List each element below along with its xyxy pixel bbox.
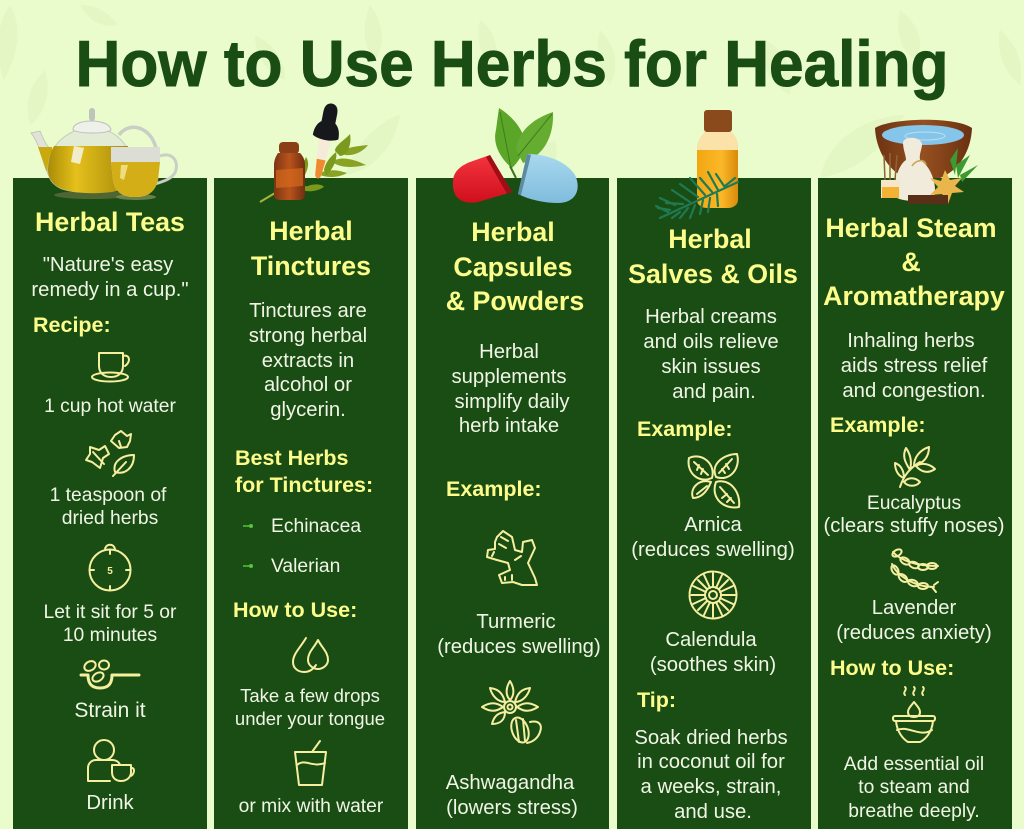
tip text: a weeks, strain, xyxy=(641,776,781,798)
icon: eucalyptus xyxy=(895,447,935,487)
description: simplify daily xyxy=(455,391,570,413)
heading: Herbal Teas xyxy=(35,207,185,237)
step: strain: Strain it xyxy=(74,699,146,722)
herb: eucalyptus: (clears stuffy noses) xyxy=(823,515,1005,537)
icon: glass with straw xyxy=(295,741,326,785)
herb: turmeric: Turmeric xyxy=(476,611,556,633)
column 2: herbal tinctures xyxy=(233,216,385,817)
column 1: herbal teas xyxy=(31,207,189,814)
step: drops: Take a few drops xyxy=(240,685,380,706)
icon: lavender xyxy=(890,548,938,592)
subheading: best herbs: for Tinctures: xyxy=(235,473,373,497)
panel: capsules background xyxy=(416,178,609,829)
icon: ashwagandha flower xyxy=(482,681,541,745)
description: alcohol or xyxy=(264,374,352,396)
illustration: teapot and cup xyxy=(31,108,176,200)
description: supplements xyxy=(452,366,566,388)
background leaf pattern xyxy=(0,5,1021,178)
heading: Herbal xyxy=(269,216,353,246)
tip text: and use. xyxy=(674,801,752,823)
subheading: example: Example: xyxy=(830,413,926,437)
heading: & xyxy=(901,247,921,277)
icon: arnica leaves xyxy=(689,454,739,507)
herb: calendula: (soothes skin) xyxy=(650,654,776,676)
panel: steam background xyxy=(818,178,1012,829)
heading: Tinctures xyxy=(251,251,371,281)
bullet list xyxy=(243,516,361,577)
illustration: tincture bottle and dropper xyxy=(260,101,368,202)
description: herb intake xyxy=(459,415,559,437)
heading: Herbal xyxy=(471,217,555,247)
description: glycerin. xyxy=(270,399,346,421)
subheading: example: Example: xyxy=(637,417,733,441)
title: How to Use Herbs for Healing xyxy=(76,27,948,100)
herb: ashwagandha: Ashwagandha xyxy=(446,772,575,794)
icon: drops xyxy=(293,638,328,672)
column 3: capsules and powders xyxy=(437,217,601,819)
heading: Herbal Steam xyxy=(825,213,997,243)
herb: ashwagandha: (lowers stress) xyxy=(446,797,578,819)
description: Herbal xyxy=(479,341,539,363)
subheading: tip: Tip: xyxy=(637,688,676,712)
icon: timer: 5 xyxy=(107,566,113,577)
description: and oils relieve xyxy=(643,331,779,353)
description: strong herbal xyxy=(249,325,367,347)
subheading: example: Example: xyxy=(446,477,542,501)
icon: strainer xyxy=(81,659,139,688)
icon: person drinking xyxy=(88,740,134,781)
heading: Aromatherapy xyxy=(823,281,1005,311)
description: and congestion. xyxy=(842,380,986,402)
column 5: steam and aromatherapy xyxy=(823,213,1005,822)
icon: timer xyxy=(90,545,130,590)
heading: Capsules xyxy=(453,252,573,282)
step: essential oil: breathe deeply. xyxy=(848,801,980,822)
icon: dried leaves xyxy=(86,431,134,476)
step: drink: Drink xyxy=(86,792,135,814)
illustration: capsule and leaves xyxy=(453,108,578,203)
panel: salves background xyxy=(617,178,811,829)
heading: Salves & Oils xyxy=(628,259,798,289)
herb: eucalyptus: Eucalyptus xyxy=(867,493,961,514)
herb: lavender: Lavender xyxy=(872,597,957,619)
description: Tinctures are xyxy=(249,300,367,322)
quote: "Nature's easy xyxy=(43,254,174,276)
icon: calendula flower xyxy=(690,572,736,618)
description: and pain. xyxy=(672,381,756,403)
description: aids stress relief xyxy=(841,355,988,377)
tip text: Soak dried herbs xyxy=(634,727,788,749)
step: let it sit: Let it sit for 5 or xyxy=(44,602,177,623)
illustration: steam bowl and spa set xyxy=(875,120,978,204)
herb: arnica: Arnica xyxy=(684,514,742,536)
heading: & Powders xyxy=(446,286,584,316)
step: dried herbs: 1 teaspoon of xyxy=(50,485,167,506)
step: let it sit: 10 minutes xyxy=(63,625,157,646)
description: Herbal creams xyxy=(645,306,777,328)
subheading: how to use: How to Use: xyxy=(830,656,954,680)
quote: remedy in a cup." xyxy=(31,279,189,301)
herb: calendula: Calendula xyxy=(665,629,757,651)
icon: turmeric root xyxy=(487,531,537,585)
column 4: salves and oils xyxy=(628,224,798,823)
step: hot water: 1 cup hot water xyxy=(44,396,176,417)
tip text: in coconut oil for xyxy=(637,751,785,773)
panel: herbal tinctures background xyxy=(214,178,408,829)
step: mix: or mix with water xyxy=(239,796,384,817)
subheading: best herbs: Best Herbs xyxy=(235,446,349,470)
panel: herbal teas background xyxy=(13,178,207,829)
description: extracts in xyxy=(262,350,354,372)
illustration: oil bottle and rosemary xyxy=(656,110,738,218)
herb: turmeric: (reduces swelling) xyxy=(437,636,601,658)
bullet list: Valerian xyxy=(271,556,340,577)
step: drops: under your tongue xyxy=(235,708,385,729)
icon: steam bowl xyxy=(893,687,935,742)
subheading: how to use: How to Use: xyxy=(233,598,357,622)
herb: arnica: (reduces swelling) xyxy=(631,539,795,561)
step: dried herbs: dried herbs xyxy=(62,508,158,529)
subheading: recipe: Recipe: xyxy=(33,313,111,337)
heading: Herbal xyxy=(668,224,752,254)
herb: lavender: (reduces anxiety) xyxy=(836,622,992,644)
step: essential oil: Add essential oil xyxy=(844,754,984,775)
description: skin issues xyxy=(661,356,761,378)
description: Inhaling herbs xyxy=(847,330,975,352)
step: essential oil: to steam and xyxy=(858,777,970,798)
bullet list: Echinacea xyxy=(271,516,361,537)
icon: teacup xyxy=(92,353,129,382)
